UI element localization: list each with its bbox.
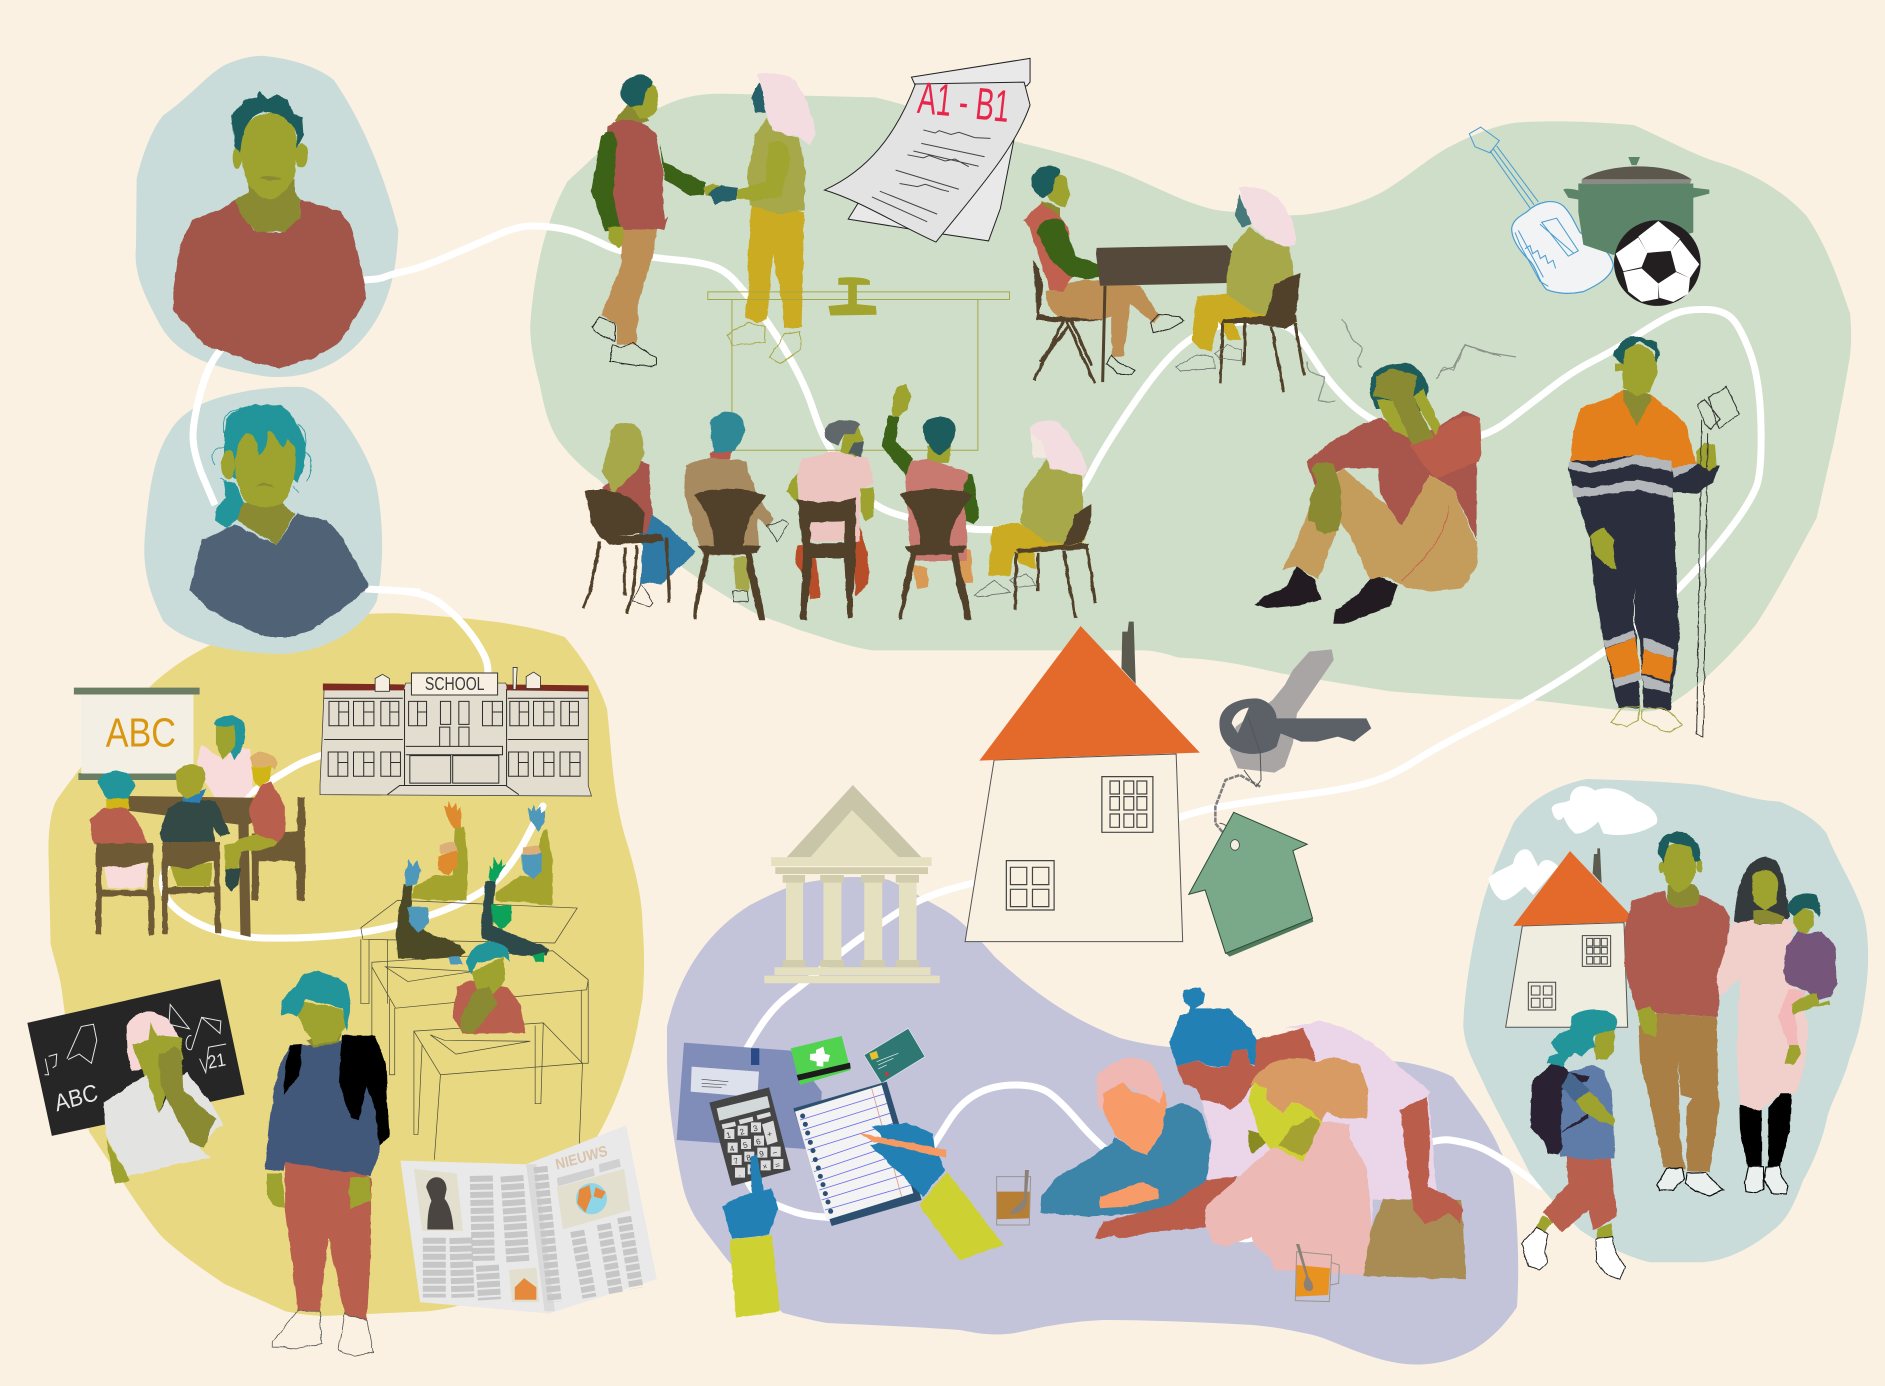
white journey path: main route — [362, 226, 1761, 1239]
abc poster — [74, 688, 200, 780]
white journey path: school route — [162, 341, 543, 938]
seated person four with raised hand — [882, 384, 979, 620]
distressed seated man with stress lines — [1255, 319, 1500, 624]
woman thinking — [104, 1012, 224, 1184]
football — [1614, 220, 1701, 306]
man at table — [1023, 166, 1183, 384]
school sign: SCHOOL — [425, 673, 485, 694]
child in blue — [1041, 1058, 1212, 1217]
background blob: green integration area — [530, 94, 1851, 712]
family at the table: child, mother, toddler — [1041, 987, 1466, 1302]
tea glass — [997, 1170, 1031, 1225]
background blob: purple finance area — [667, 877, 1518, 1364]
calculator: + — [766, 1129, 773, 1139]
newspaper portrait — [426, 1177, 454, 1230]
chalk text — [52, 1049, 227, 1117]
calculator: 6 — [755, 1137, 762, 1147]
calculator: 1 — [725, 1130, 733, 1140]
girl at desk — [453, 942, 525, 1033]
seated person five — [975, 420, 1095, 618]
newspaper — [400, 1125, 657, 1314]
calculator — [709, 1087, 791, 1186]
mother — [1095, 987, 1466, 1279]
calculator: 0 — [749, 1166, 756, 1175]
bank card — [864, 1028, 925, 1083]
student back left — [412, 802, 468, 900]
calculator: 2 — [739, 1127, 746, 1137]
keys with house keychain — [1189, 649, 1371, 957]
portrait: man — [173, 91, 367, 368]
right child and chair — [224, 753, 305, 900]
house icon — [515, 1278, 536, 1300]
document heading: A1 - B1 — [916, 72, 1012, 132]
sketch table with bell — [708, 277, 1010, 450]
toddler held by mother — [1778, 893, 1837, 1065]
girl with backpack — [1522, 1009, 1625, 1279]
newspaper headline: NIEUWS — [554, 1143, 609, 1174]
seated person one — [583, 423, 696, 614]
calculator: 5 — [742, 1140, 749, 1150]
calculator: 8 — [745, 1153, 753, 1163]
envelope — [677, 1043, 822, 1150]
toddler — [1205, 1057, 1372, 1275]
calculator: 4 — [729, 1144, 736, 1154]
calculator: . — [737, 1169, 742, 1179]
hand with pencil — [860, 1123, 1004, 1260]
calculator: 9 — [758, 1149, 766, 1159]
hobby objects: guitar, pot, football — [1440, 127, 1709, 371]
mother holding toddler — [1717, 857, 1837, 1194]
tea mug — [1295, 1244, 1339, 1302]
white path segments over portrait blobs — [193, 271, 420, 592]
calculator: × — [762, 1162, 769, 1172]
health card — [791, 1036, 851, 1085]
group sitting in a row: five people on chairs — [583, 384, 1095, 620]
portrait: woman — [189, 405, 368, 637]
boy with backpack — [265, 972, 389, 1356]
teacher — [198, 715, 253, 799]
table — [1096, 245, 1233, 382]
table — [128, 796, 259, 937]
calculator: 7 — [733, 1156, 740, 1166]
abc poster: ABC — [106, 710, 176, 756]
language document A1-B1 — [824, 58, 1030, 242]
student front right — [481, 857, 549, 962]
chalk text: ABC — [52, 1079, 100, 1117]
classroom desks sketch — [361, 900, 588, 1160]
hand on calculator — [723, 1155, 780, 1318]
chalkboard with woman — [27, 979, 245, 1184]
raised-hand students — [396, 802, 553, 1033]
chalk text: 21 — [206, 1049, 227, 1073]
small house in family scene — [1506, 848, 1637, 1027]
cooking pot — [1563, 157, 1709, 255]
background blob: family teal area — [1463, 779, 1868, 1262]
globe — [576, 1183, 607, 1214]
school group: classroom table with teacher and three children — [74, 688, 305, 937]
portrait blobs — [136, 56, 398, 654]
guitar — [1469, 127, 1613, 293]
calculator: = — [774, 1160, 781, 1170]
school building — [320, 667, 591, 796]
calculator: − — [772, 1148, 779, 1158]
notebook — [793, 1082, 922, 1226]
house with orange roof — [965, 622, 1200, 942]
meeting: handshake woman — [708, 73, 815, 363]
seated person three — [786, 420, 874, 620]
government temple building — [764, 785, 940, 983]
worker in high-vis overalls with shovel — [1568, 336, 1739, 737]
woman at table — [1177, 187, 1304, 392]
middle child and chair — [160, 764, 230, 934]
left child and chair — [89, 771, 155, 935]
finance documents — [677, 1028, 1031, 1318]
student back right — [496, 804, 553, 905]
background blob: yellow school area — [48, 613, 644, 1316]
meeting: handshake man — [591, 74, 730, 366]
seated person two — [684, 411, 789, 620]
father — [1625, 832, 1730, 1196]
calculator: 3 — [752, 1124, 759, 1133]
clouds — [1488, 786, 1657, 900]
student front left — [396, 859, 465, 965]
